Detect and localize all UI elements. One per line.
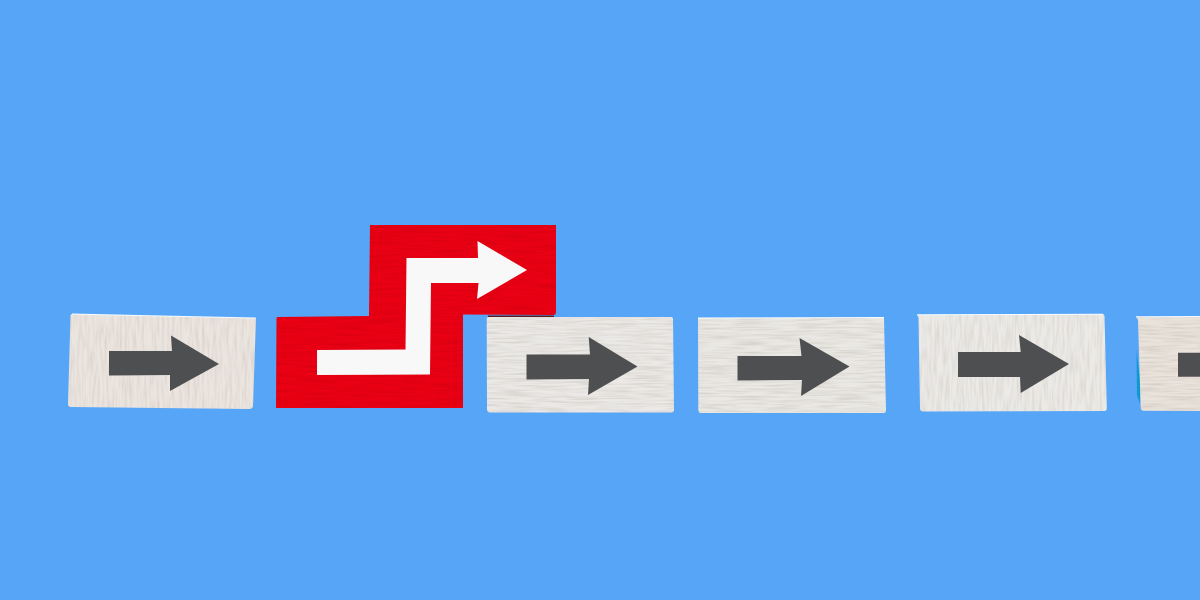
block 1: beige with dark arrow — [68, 314, 256, 409]
block 2: red stepped block with white arrow — [276, 225, 556, 408]
icon: white stepped arrow — [317, 241, 527, 375]
icon: dark arrow — [526, 337, 638, 395]
block 3: white with dark arrow — [487, 317, 674, 412]
block 4: white with dark arrow — [698, 318, 886, 413]
icon: dark arrow cropped — [1178, 353, 1200, 377]
icon: dark arrow — [958, 335, 1069, 393]
block 5: white with dark arrow — [917, 314, 1107, 412]
icon: dark arrow — [738, 338, 850, 396]
block 6: partially cropped block with dark arrow — [1136, 316, 1200, 411]
icon: dark arrow — [109, 336, 219, 391]
